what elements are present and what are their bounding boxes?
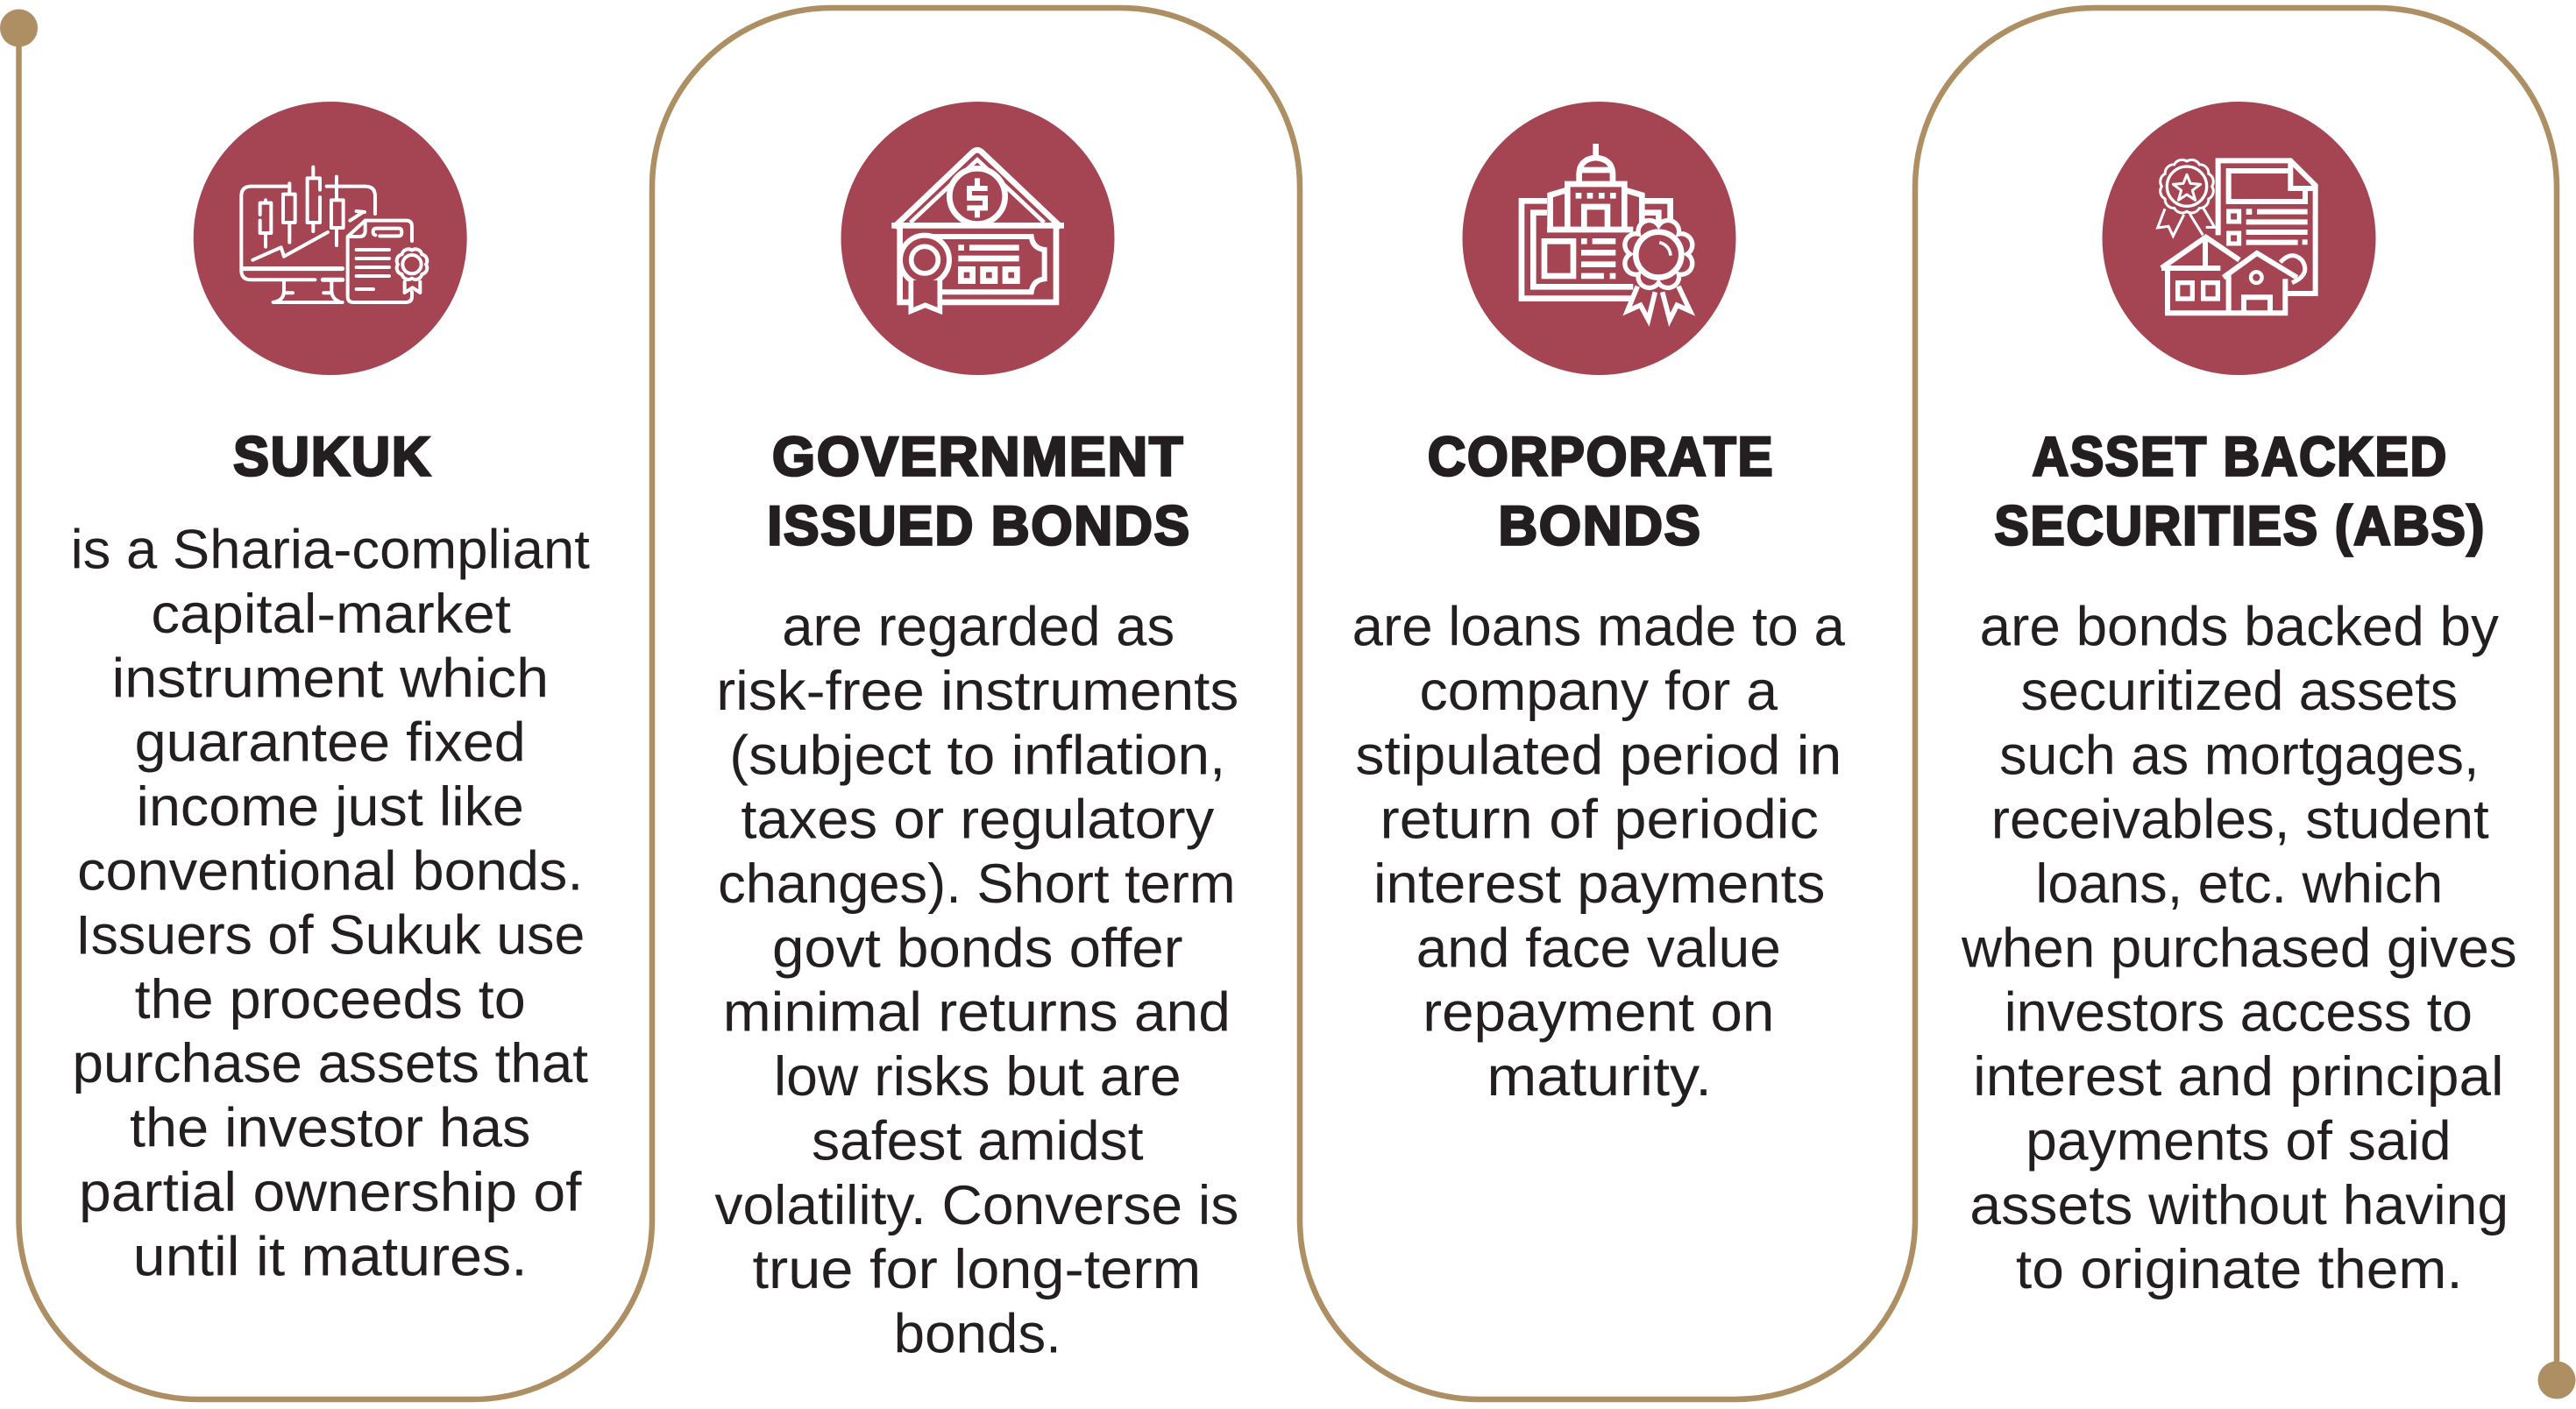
text block: Sukuk description: purchase assets that xyxy=(72,1033,589,1094)
text block: ABS description xyxy=(1961,597,2517,1300)
text block: Corporate bonds description: repayment on xyxy=(1423,982,1774,1044)
text block: Sukuk description: until it matures. xyxy=(133,1226,528,1287)
text block: Sukuk description: instrument which xyxy=(111,648,549,709)
text block: Government bonds description: volatility. Converse is xyxy=(714,1175,1238,1236)
text block: Government bonds description: are regarded as xyxy=(782,597,1174,658)
panel: corporate bonds xyxy=(1352,102,1846,1108)
text block: Corporate bonds description: stipulated period in xyxy=(1355,725,1842,786)
text block: Sukuk description: the proceeds to xyxy=(135,969,526,1030)
text block: Government bonds description: (subject to inflation, xyxy=(729,725,1225,786)
heading: Corporate bonds xyxy=(1428,427,1774,557)
text block: ABS description: to originate them. xyxy=(2016,1239,2463,1300)
panel: sukuk xyxy=(71,102,590,1287)
panel: government issued bonds xyxy=(714,102,1238,1364)
text block: ABS description: loans, etc. which xyxy=(2035,853,2443,915)
text block: Sukuk description: the investor has xyxy=(130,1098,530,1159)
text block: Corporate bonds description xyxy=(1352,597,1846,1108)
text block: Corporate bonds description: return of periodic xyxy=(1380,789,1819,851)
text block: Sukuk description: income just like xyxy=(137,776,524,838)
heading: Corporate bonds: BONDS xyxy=(1498,496,1702,557)
text block: Sukuk description: partial ownership of xyxy=(79,1162,582,1223)
heading: Asset backed securities (ABS): ASSET BACKED xyxy=(2033,427,2448,488)
text block: Government bonds description: true for long-term xyxy=(752,1239,1201,1300)
text block: ABS description: when purchased gives xyxy=(1961,917,2517,979)
text block: Government bonds description: risk-free instruments xyxy=(716,661,1238,722)
icon badge: house with dollar coin and bond certificate xyxy=(841,102,1115,375)
text block: ABS description: receivables, student xyxy=(1991,789,2489,851)
text block: ABS description: such as mortgages, xyxy=(1999,725,2479,786)
heading: Asset backed securities (ABS): SECURITIES (ABS) xyxy=(1995,496,2486,557)
icon badge: domed building certificate with rosette xyxy=(1462,102,1735,375)
icon badge: houses, document and star rosette xyxy=(2102,102,2375,375)
text block: Corporate bonds description: maturity. xyxy=(1487,1046,1712,1108)
text block: Government bonds description xyxy=(714,597,1238,1364)
icon badge: monitor with candlesticks and certificate xyxy=(194,102,467,375)
text block: Government bonds description: minimal returns and xyxy=(723,982,1231,1044)
text block: ABS description: are bonds backed by xyxy=(1980,597,2499,658)
text block: ABS description: assets without having xyxy=(1969,1175,2509,1236)
text block: Government bonds description: safest amidst xyxy=(812,1110,1144,1172)
text block: ABS description: securitized assets xyxy=(2021,661,2458,722)
text block: Corporate bonds description: and face value xyxy=(1416,917,1781,979)
text block: Sukuk description: guarantee fixed xyxy=(135,712,526,774)
text block: Government bonds description: changes). Short term xyxy=(718,853,1236,915)
text block: Corporate bonds description: are loans made to a xyxy=(1352,597,1846,658)
text block: ABS description: investors access to xyxy=(2005,982,2473,1044)
text block: Government bonds description: low risks but are xyxy=(774,1046,1182,1108)
heading: Government issued bonds: GOVERNMENT xyxy=(772,427,1184,488)
start dot xyxy=(0,9,38,47)
text block: Government bonds description: bonds. xyxy=(894,1303,1061,1364)
panel: asset backed securities xyxy=(1961,102,2517,1300)
heading: Sukuk: SUKUK xyxy=(233,427,432,488)
text block: Corporate bonds description: company for a xyxy=(1419,661,1778,722)
text block: Sukuk description: capital-market xyxy=(151,584,511,645)
text block: Corporate bonds description: interest payments xyxy=(1373,853,1825,915)
text block: Sukuk description: conventional bonds. xyxy=(77,840,583,902)
heading: Corporate bonds: CORPORATE xyxy=(1428,427,1774,488)
text block: ABS description: interest and principal xyxy=(1973,1046,2504,1108)
text block: Sukuk description: Issuers of Sukuk use xyxy=(75,905,585,966)
heading: Government issued bonds: ISSUED BONDS xyxy=(767,496,1191,557)
text block: Sukuk description: is a Sharia-compliant xyxy=(71,520,590,581)
text block: Government bonds description: govt bonds offer xyxy=(772,917,1183,979)
text block: ABS description: payments of said xyxy=(2026,1110,2452,1172)
end dot xyxy=(2538,1362,2575,1398)
text block: Sukuk description xyxy=(71,520,590,1287)
heading: Government issued bonds xyxy=(767,427,1191,557)
heading: Asset backed securities (ABS) xyxy=(1995,427,2486,557)
text block: Government bonds description: taxes or regulatory xyxy=(741,789,1215,851)
